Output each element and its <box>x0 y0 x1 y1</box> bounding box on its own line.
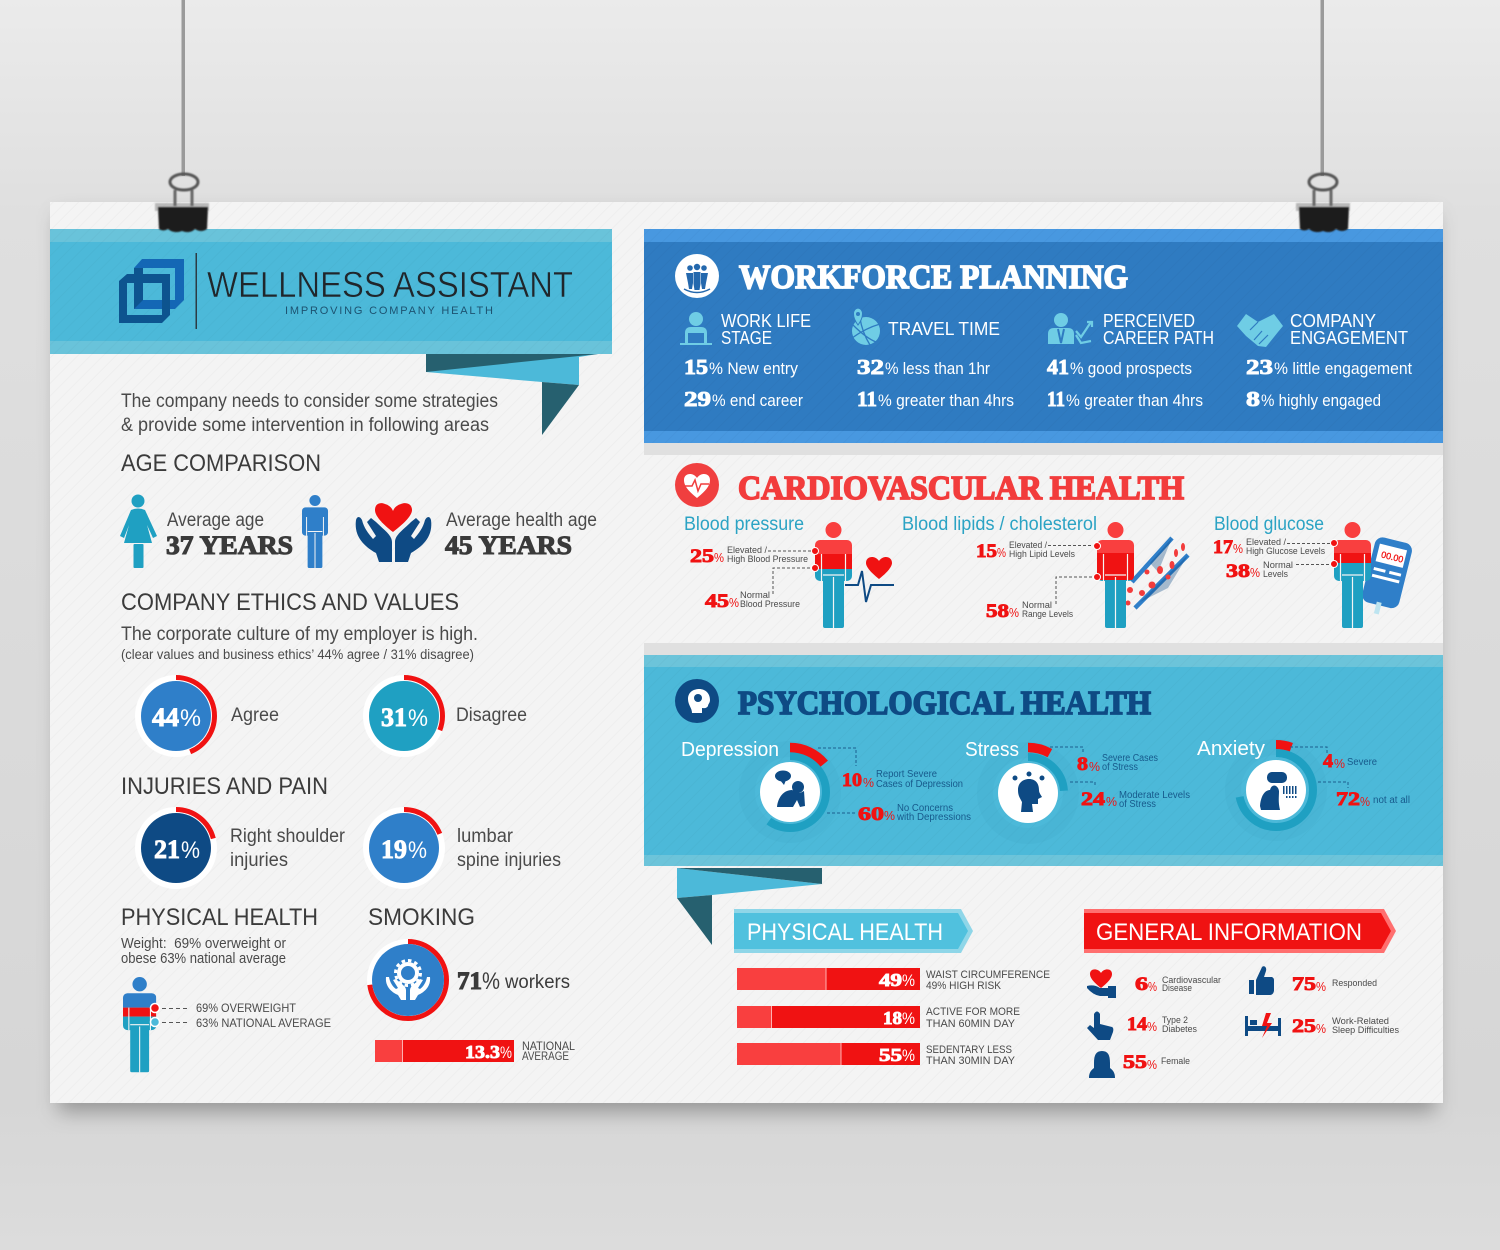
column: company engagement: 23 <box>1246 355 1273 379</box>
group: blood pressure: % <box>729 595 739 610</box>
stat: sleep difficulties: 25 <box>1292 1016 1316 1037</box>
group: depression: No Concerns <box>897 803 953 814</box>
group: blood pressure: Normal <box>740 590 770 600</box>
icon: male figure <box>302 495 328 568</box>
group: anxiety: % <box>1360 794 1370 809</box>
text: average age: 37 YEARS <box>166 531 293 560</box>
label: lumbar spine injuries <box>457 826 561 871</box>
group: stress: of Stress <box>1102 762 1138 773</box>
text: 71% workers <box>457 968 570 995</box>
donut: disagree 31% <box>363 675 445 757</box>
group: anxiety: 72 <box>1336 789 1360 810</box>
icon: gear in hands <box>386 960 430 1000</box>
bar: waist circumference: % <box>902 971 915 990</box>
text: 71% workers: 71 <box>457 968 482 995</box>
poster sheet <box>50 202 1443 1103</box>
bar: active <box>737 1006 1020 1030</box>
donut: stress <box>982 748 1074 838</box>
group: blood glucose: 17 <box>1213 537 1234 558</box>
text: average health age: 45 YEARS <box>445 531 572 560</box>
column: work life stage: WORK LIFE <box>721 311 811 331</box>
text block: corporate culture <box>121 624 478 662</box>
text block: weight <box>121 936 286 967</box>
text block: intro <box>121 391 498 436</box>
stat: cardiovascular disease <box>1087 969 1221 998</box>
text block: weight: obese 63% national average <box>121 951 286 967</box>
panel: psychological health <box>644 655 1443 866</box>
label: lumbar spine injuries: spine injuries <box>457 850 561 871</box>
group: blood pressure: 25 <box>690 546 714 567</box>
icon: person with thought <box>775 770 805 807</box>
group: blood lipids: % <box>997 545 1006 560</box>
text block: corporate culture: The corporate culture of my employer is high. <box>121 624 478 645</box>
column: travel time: 32 <box>857 355 884 379</box>
donut: depression <box>746 748 834 836</box>
icon: glucose meter: 00.00 <box>1380 549 1404 565</box>
group: depression: Report Severe <box>876 769 937 780</box>
group: stress: Moderate Levels <box>1119 790 1190 801</box>
group: anxiety <box>1197 738 1410 836</box>
column: work life stage: % New entry <box>709 359 798 378</box>
stat: type 2 diabetes: % <box>1147 1019 1157 1034</box>
icon: people circle <box>675 254 719 298</box>
column: company engagement: % little engagement <box>1274 359 1412 378</box>
column: travel time: TRAVEL TIME <box>888 319 1000 339</box>
column: perceived career path: CAREER PATH <box>1103 328 1214 348</box>
donut: disagree 31%: 31 <box>381 703 407 732</box>
group: anxiety: not at all <box>1373 795 1410 806</box>
text block: intro: The company needs to consider some strategies <box>121 391 498 412</box>
column: company engagement: COMPANY <box>1290 311 1376 331</box>
bar: national average 13.3% <box>375 1040 576 1063</box>
group: blood pressure <box>684 514 894 628</box>
icon: stressed head <box>1012 772 1044 812</box>
column: work life stage: 29 <box>684 387 711 411</box>
heading: company ethics: COMPANY ETHICS AND VALUES <box>121 589 459 616</box>
heading: cardiovascular health: CARDIOVASCULAR HEALTH <box>738 470 1184 507</box>
figure: person blood pressure <box>815 522 852 628</box>
group: blood glucose: % <box>1250 565 1260 580</box>
group: blood lipids: Elevated / <box>1009 540 1047 550</box>
banner: physical health: PHYSICAL HEALTH <box>747 919 943 946</box>
icon: binder clip right <box>1296 174 1350 232</box>
bar: sedentary <box>737 1043 1016 1067</box>
banner: general information: GENERAL INFORMATION <box>1096 919 1362 946</box>
text block: corporate culture: (clear values and business ethics’ 44% agree / 31% disagree) <box>121 647 474 662</box>
stat: type 2 diabetes: Diabetes <box>1162 1024 1197 1034</box>
panel: cardiovascular health <box>644 443 1443 655</box>
stat: sleep difficulties: Sleep Difficulties <box>1332 1025 1399 1035</box>
group: stress: % <box>1089 759 1100 774</box>
label: disagree: Disagree <box>456 705 527 726</box>
stat: female: Female <box>1161 1056 1190 1066</box>
column: work life stage: STAGE <box>721 328 772 348</box>
column: travel time: 11 <box>857 387 877 411</box>
group: blood pressure: Blood pressure <box>684 514 804 535</box>
figure: person lipids <box>1097 522 1134 628</box>
group: blood glucose <box>1213 514 1414 628</box>
donut: shoulder 21%: 21 <box>154 835 180 864</box>
stat: responded: % <box>1316 979 1326 994</box>
bar: waist circumference: 49 <box>879 970 902 990</box>
heading: smoking: SMOKING <box>368 904 475 931</box>
group: anxiety: Severe <box>1347 757 1377 768</box>
group: blood lipids: 15 <box>976 541 997 562</box>
donut: shoulder 21%: % <box>181 837 200 864</box>
bar: sedentary: % <box>902 1046 915 1065</box>
bar: active: THAN 60MIN DAY <box>926 1018 1016 1030</box>
stat: responded: 75 <box>1292 974 1316 995</box>
donut: agree 44% <box>135 675 217 757</box>
text: average health age: Average health age <box>446 510 597 531</box>
bar: waist circumference <box>737 968 1050 992</box>
group: stress <box>965 739 1190 838</box>
ribbon fold: left <box>426 354 598 435</box>
group: stress: % <box>1106 794 1117 809</box>
subtitle: IMPROVING COMPANY HEALTH <box>285 305 493 317</box>
group: depression: Depression <box>681 739 779 761</box>
label: right shoulder injuries: Right shoulder <box>230 826 346 847</box>
stat: type 2 diabetes <box>1087 1012 1197 1040</box>
donut: shoulder 21% <box>135 807 217 889</box>
label: lumbar spine injuries: lumbar <box>457 826 514 847</box>
bar: sedentary: SEDENTARY LESS <box>926 1044 1012 1056</box>
column: perceived career path <box>1047 311 1214 411</box>
donut: disagree 31%: % <box>408 705 428 732</box>
stat: cardiovascular disease: 6 <box>1135 974 1148 995</box>
donut: agree 44%: % <box>180 705 201 732</box>
text block: weight: Weight: 69% overweight or <box>121 936 286 952</box>
icon: logo <box>119 259 184 323</box>
heading: injuries and pain: INJURIES AND PAIN <box>121 773 328 800</box>
group: blood glucose: 38 <box>1226 561 1250 582</box>
donut: smoking 71% <box>367 939 449 1021</box>
bar: sedentary: THAN 30MIN DAY <box>926 1055 1016 1067</box>
column: work life stage: 15 <box>684 355 708 379</box>
text: 71% workers: % <box>482 968 500 995</box>
group: stress: Stress <box>965 739 1019 761</box>
text: average health age <box>445 510 597 560</box>
column: perceived career path: 11 <box>1047 387 1065 411</box>
text: 71% workers: workers <box>504 972 570 993</box>
text block: intro: & provide some intervention in following areas <box>121 415 489 436</box>
icon: head circle <box>675 679 719 723</box>
group: stress: of Stress <box>1119 799 1156 810</box>
stat: female: 55 <box>1123 1052 1147 1073</box>
group: stress: Severe Cases <box>1102 753 1158 764</box>
column: perceived career path: PERCEIVED <box>1103 311 1195 331</box>
group: blood glucose: % <box>1233 541 1243 556</box>
donut: lumbar 19%: % <box>408 837 427 864</box>
group: blood pressure: % <box>714 550 724 565</box>
group: anxiety: 4 <box>1323 751 1334 772</box>
title: WELLNESS ASSISTANT <box>207 264 573 305</box>
stat: responded: Responded <box>1332 978 1377 988</box>
group: blood lipids: Range Levels <box>1022 609 1073 619</box>
bar: national average 13.3%: AVERAGE <box>522 1051 569 1063</box>
label: agree: Agree <box>231 705 279 726</box>
group: blood lipids: % <box>1009 605 1019 620</box>
group: depression: with Depressions <box>896 812 971 823</box>
group: blood lipids: High Lipid Levels <box>1009 549 1075 559</box>
group: blood lipids: 58 <box>986 601 1009 622</box>
group: blood pressure: High Blood Pressure <box>727 554 808 564</box>
banner: general information <box>1084 909 1396 953</box>
heading: age comparison: AGE COMPARISON <box>121 450 321 477</box>
heading: psychological health: PSYCHOLOGICAL HEALTH <box>738 685 1151 722</box>
figure: weight body <box>123 977 331 1072</box>
column: company engagement: ENGAGEMENT <box>1290 328 1408 348</box>
group: depression: Cases of Depression <box>876 779 963 790</box>
stat: responded <box>1249 966 1377 995</box>
bar: sedentary: 55 <box>879 1045 902 1065</box>
icon: hands holding heart <box>356 503 431 562</box>
column: travel time: % greater than 4hrs <box>878 391 1014 410</box>
panel: workforce planning <box>644 229 1443 443</box>
icon: artery <box>1126 538 1188 608</box>
column: travel time <box>852 308 1014 411</box>
column: work life stage: % end career <box>712 391 803 410</box>
poster shadow <box>58 215 1436 1112</box>
bar: waist circumference: WAIST CIRCUMFERENCE <box>926 969 1050 981</box>
group: stress: 24 <box>1081 789 1106 810</box>
group: blood glucose: Levels <box>1263 569 1288 579</box>
stat: female <box>1089 1051 1190 1078</box>
group: depression: % <box>863 775 874 790</box>
donut: lumbar 19%: 19 <box>381 835 407 864</box>
label: right shoulder injuries: injuries <box>230 850 288 871</box>
column: travel time: % less than 1hr <box>885 359 990 378</box>
figure: weight body: 63% NATIONAL AVERAGE <box>196 1016 331 1030</box>
donut: lumbar 19% <box>363 807 445 889</box>
stat: sleep difficulties <box>1245 1013 1399 1038</box>
column: company engagement: 8 <box>1246 387 1260 411</box>
group: blood lipids: Normal <box>1022 600 1052 610</box>
group: stress: 8 <box>1077 754 1088 775</box>
group: blood glucose: High Glucose Levels <box>1246 546 1325 556</box>
icon: anxious person <box>1260 772 1296 810</box>
hanging wires <box>182 0 1324 176</box>
bar: active: % <box>902 1009 915 1028</box>
bar: active: 18 <box>883 1008 902 1028</box>
text: average age: Average age <box>167 510 264 531</box>
icon: glucose meter <box>1358 536 1414 619</box>
bar: waist circumference: 49% HIGH RISK <box>926 980 1002 992</box>
column: company engagement: % highly engaged <box>1261 391 1381 410</box>
column: company engagement <box>1237 311 1412 411</box>
group: depression: 60 <box>858 804 884 825</box>
bar: national average 13.3%: NATIONAL <box>522 1041 576 1053</box>
stat: type 2 diabetes: Type 2 <box>1162 1015 1188 1025</box>
group: depression: 10 <box>842 770 862 791</box>
banner: physical health <box>734 909 973 953</box>
panel: header ribbon <box>50 229 612 354</box>
icon: heart circle <box>675 463 719 507</box>
group: depression: % <box>884 808 895 823</box>
column: perceived career path: 41 <box>1047 355 1069 379</box>
column: work life stage <box>680 311 811 411</box>
heading: physical health: PHYSICAL HEALTH <box>121 904 318 931</box>
group: anxiety: % <box>1334 756 1345 771</box>
stat: cardiovascular disease: Disease <box>1162 983 1192 993</box>
icon: female figure <box>120 494 157 568</box>
stat: type 2 diabetes: 14 <box>1127 1014 1148 1035</box>
group: blood glucose: Blood glucose <box>1214 514 1324 535</box>
group: anxiety: Anxiety <box>1197 738 1265 760</box>
stat: female: % <box>1147 1057 1157 1072</box>
donut: anxiety <box>1230 744 1322 836</box>
group: blood pressure: Elevated / <box>727 545 767 555</box>
group: blood pressure: Blood Pressure <box>740 599 800 609</box>
bar: national average 13.3%: 13.3 <box>465 1042 500 1062</box>
stat: sleep difficulties: % <box>1316 1021 1326 1036</box>
text: average age <box>166 510 293 560</box>
label: right shoulder injuries <box>230 826 346 871</box>
stat: cardiovascular disease: % <box>1148 979 1157 994</box>
bar: national average 13.3%: % <box>500 1043 512 1062</box>
group: blood pressure: 45 <box>705 591 729 612</box>
group: blood lipids <box>902 514 1188 628</box>
column: perceived career path: % good prospects <box>1070 359 1192 378</box>
heading: workforce planning: WORKFORCE PLANNING <box>739 259 1128 296</box>
bar: active: ACTIVE FOR MORE <box>926 1006 1020 1018</box>
stat: cardiovascular disease: Cardiovascular <box>1162 975 1221 985</box>
figure: weight body: 69% OVERWEIGHT <box>196 1001 297 1015</box>
donut: agree 44%: 44 <box>152 703 179 732</box>
ribbon fold: right <box>677 868 822 945</box>
column: perceived career path: % greater than 4hrs <box>1066 391 1203 410</box>
group: depression <box>681 739 971 836</box>
icon: binder clip left <box>155 174 209 232</box>
group: blood glucose: Elevated / <box>1246 537 1286 547</box>
group: blood lipids: Blood lipids / cholesterol <box>902 514 1097 535</box>
group: blood glucose: Normal <box>1263 560 1293 570</box>
figure: person glucose <box>1334 522 1371 628</box>
icon: heart and pulse <box>845 557 894 602</box>
stat: sleep difficulties: Work-Related <box>1332 1016 1389 1026</box>
